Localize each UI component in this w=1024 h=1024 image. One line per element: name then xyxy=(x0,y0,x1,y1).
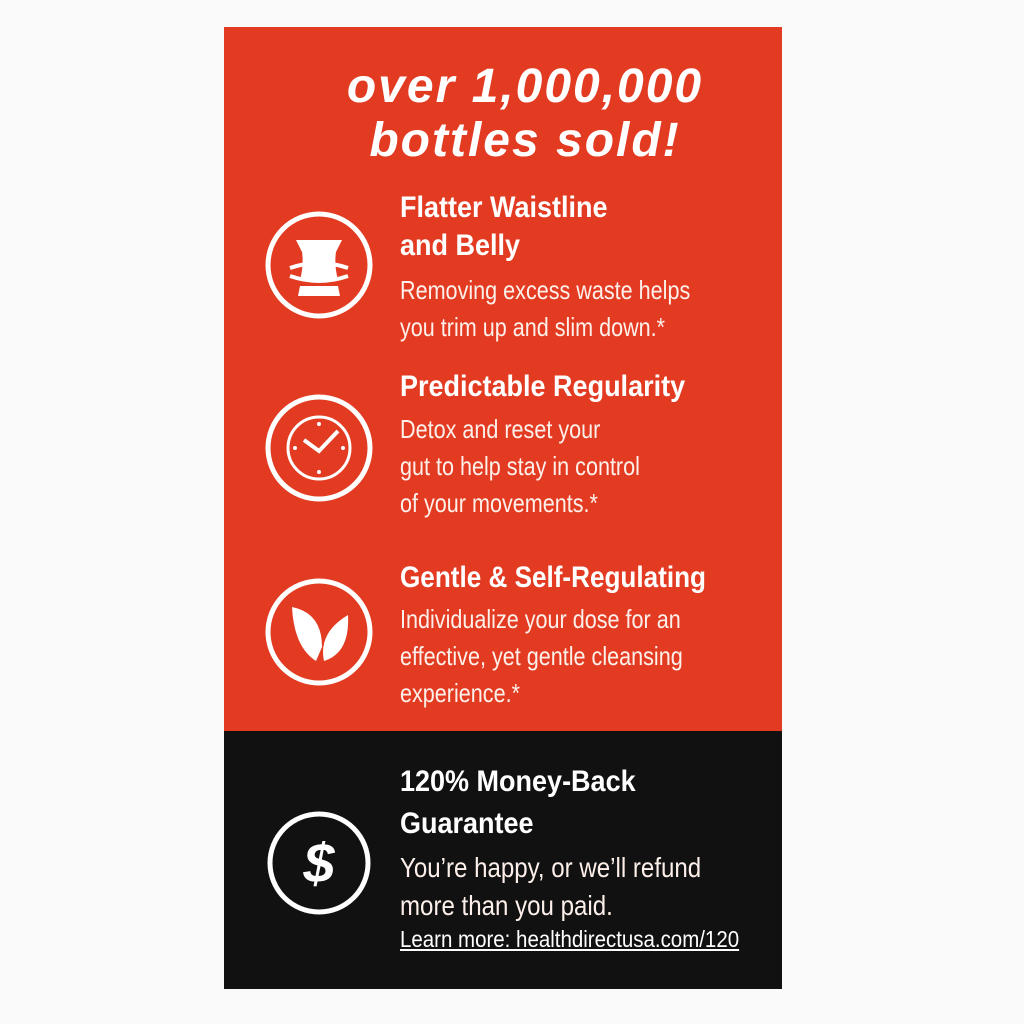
heading 4: Guarantee xyxy=(400,807,534,840)
body 3: Individualize your dose for an xyxy=(400,604,681,634)
body 2: gut to help stay in control xyxy=(400,451,640,481)
panel: red benefits xyxy=(224,27,782,731)
body 1: Removing excess waste helps xyxy=(400,275,690,305)
heading 2: Predictable Regularity xyxy=(400,370,685,403)
body 3: effective, yet gentle cleansing xyxy=(400,641,683,671)
panel: black guarantee xyxy=(224,731,782,989)
body 1: you trim up and slim down.* xyxy=(400,312,665,342)
body 4 xyxy=(400,852,701,921)
icon: dollar: $ xyxy=(302,831,335,894)
icon: dollar xyxy=(268,812,370,914)
heading 1: and Belly xyxy=(400,229,520,262)
body 4: You’re happy, or we’ll refund xyxy=(400,852,701,883)
body 2: Detox and reset your xyxy=(400,414,600,444)
body 2: of your movements.* xyxy=(400,488,598,518)
title: over 1,000,000 xyxy=(347,60,703,113)
body 1 xyxy=(400,275,690,342)
title: bottles sold! xyxy=(369,114,681,167)
title xyxy=(347,60,703,167)
link: Learn more: healthdirectusa.com/120 xyxy=(400,926,739,952)
heading 4: 120% Money-Back xyxy=(400,765,636,798)
heading 1 xyxy=(400,191,608,262)
icon: clock xyxy=(266,394,372,502)
heading 4 xyxy=(400,765,636,840)
heading 1: Flatter Waistline xyxy=(400,191,608,224)
body 3 xyxy=(400,604,683,708)
body 2 xyxy=(400,414,640,518)
icon: leaves xyxy=(266,578,372,686)
icon: waistline xyxy=(266,212,372,318)
body 3: experience.* xyxy=(400,678,520,708)
heading 3: Gentle & Self-Regulating xyxy=(400,561,706,594)
body 4: more than you paid. xyxy=(400,890,613,921)
